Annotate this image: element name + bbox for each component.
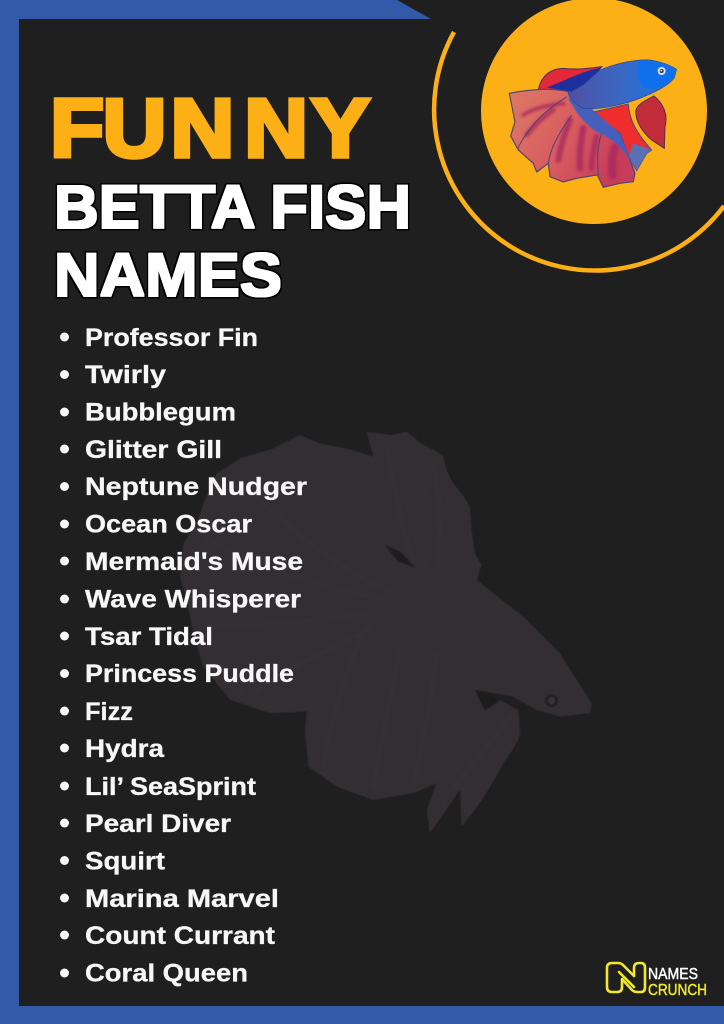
names: Tsar Tidal bbox=[85, 623, 213, 651]
names: Ocean Oscar bbox=[85, 510, 252, 538]
yellow circle bbox=[481, 0, 707, 224]
icon: colourful betta fish bbox=[509, 60, 677, 187]
bullets bbox=[60, 332, 69, 978]
title: BETTA FISH: BETTA FISH bbox=[54, 173, 411, 241]
names: Lil’ SeaSprint bbox=[85, 773, 257, 801]
names: Twirly bbox=[85, 361, 166, 389]
names: Princess Puddle bbox=[85, 660, 294, 688]
ghost betta fish watermark bbox=[180, 432, 592, 833]
icon: N logo mark bbox=[607, 963, 645, 992]
names: Mermaid's Muse bbox=[85, 548, 303, 576]
names bbox=[85, 324, 307, 988]
names: Neptune Nudger bbox=[85, 473, 307, 501]
names: Squirt bbox=[85, 848, 166, 876]
logo: Names Crunch bbox=[607, 963, 707, 999]
names: Pearl Diver bbox=[85, 810, 231, 838]
yellow ring arc bbox=[434, 32, 724, 271]
logo text: CRUNCH: CRUNCH bbox=[648, 982, 707, 999]
title: FUNNY: FUNNY bbox=[50, 83, 370, 175]
logo text: NAMES: NAMES bbox=[648, 966, 698, 983]
names: Count Currant bbox=[85, 922, 276, 950]
names: Fizz bbox=[85, 698, 133, 726]
title bbox=[50, 83, 411, 309]
names: Professor Fin bbox=[85, 324, 258, 352]
title: NAMES: NAMES bbox=[54, 241, 282, 309]
names: Bubblegum bbox=[85, 398, 236, 426]
names: Glitter Gill bbox=[85, 436, 222, 464]
names: Coral Queen bbox=[85, 960, 248, 988]
names: Wave Whisperer bbox=[85, 586, 301, 614]
names: Hydra bbox=[85, 735, 165, 763]
names: Marina Marvel bbox=[85, 885, 279, 913]
name list bbox=[60, 324, 307, 988]
